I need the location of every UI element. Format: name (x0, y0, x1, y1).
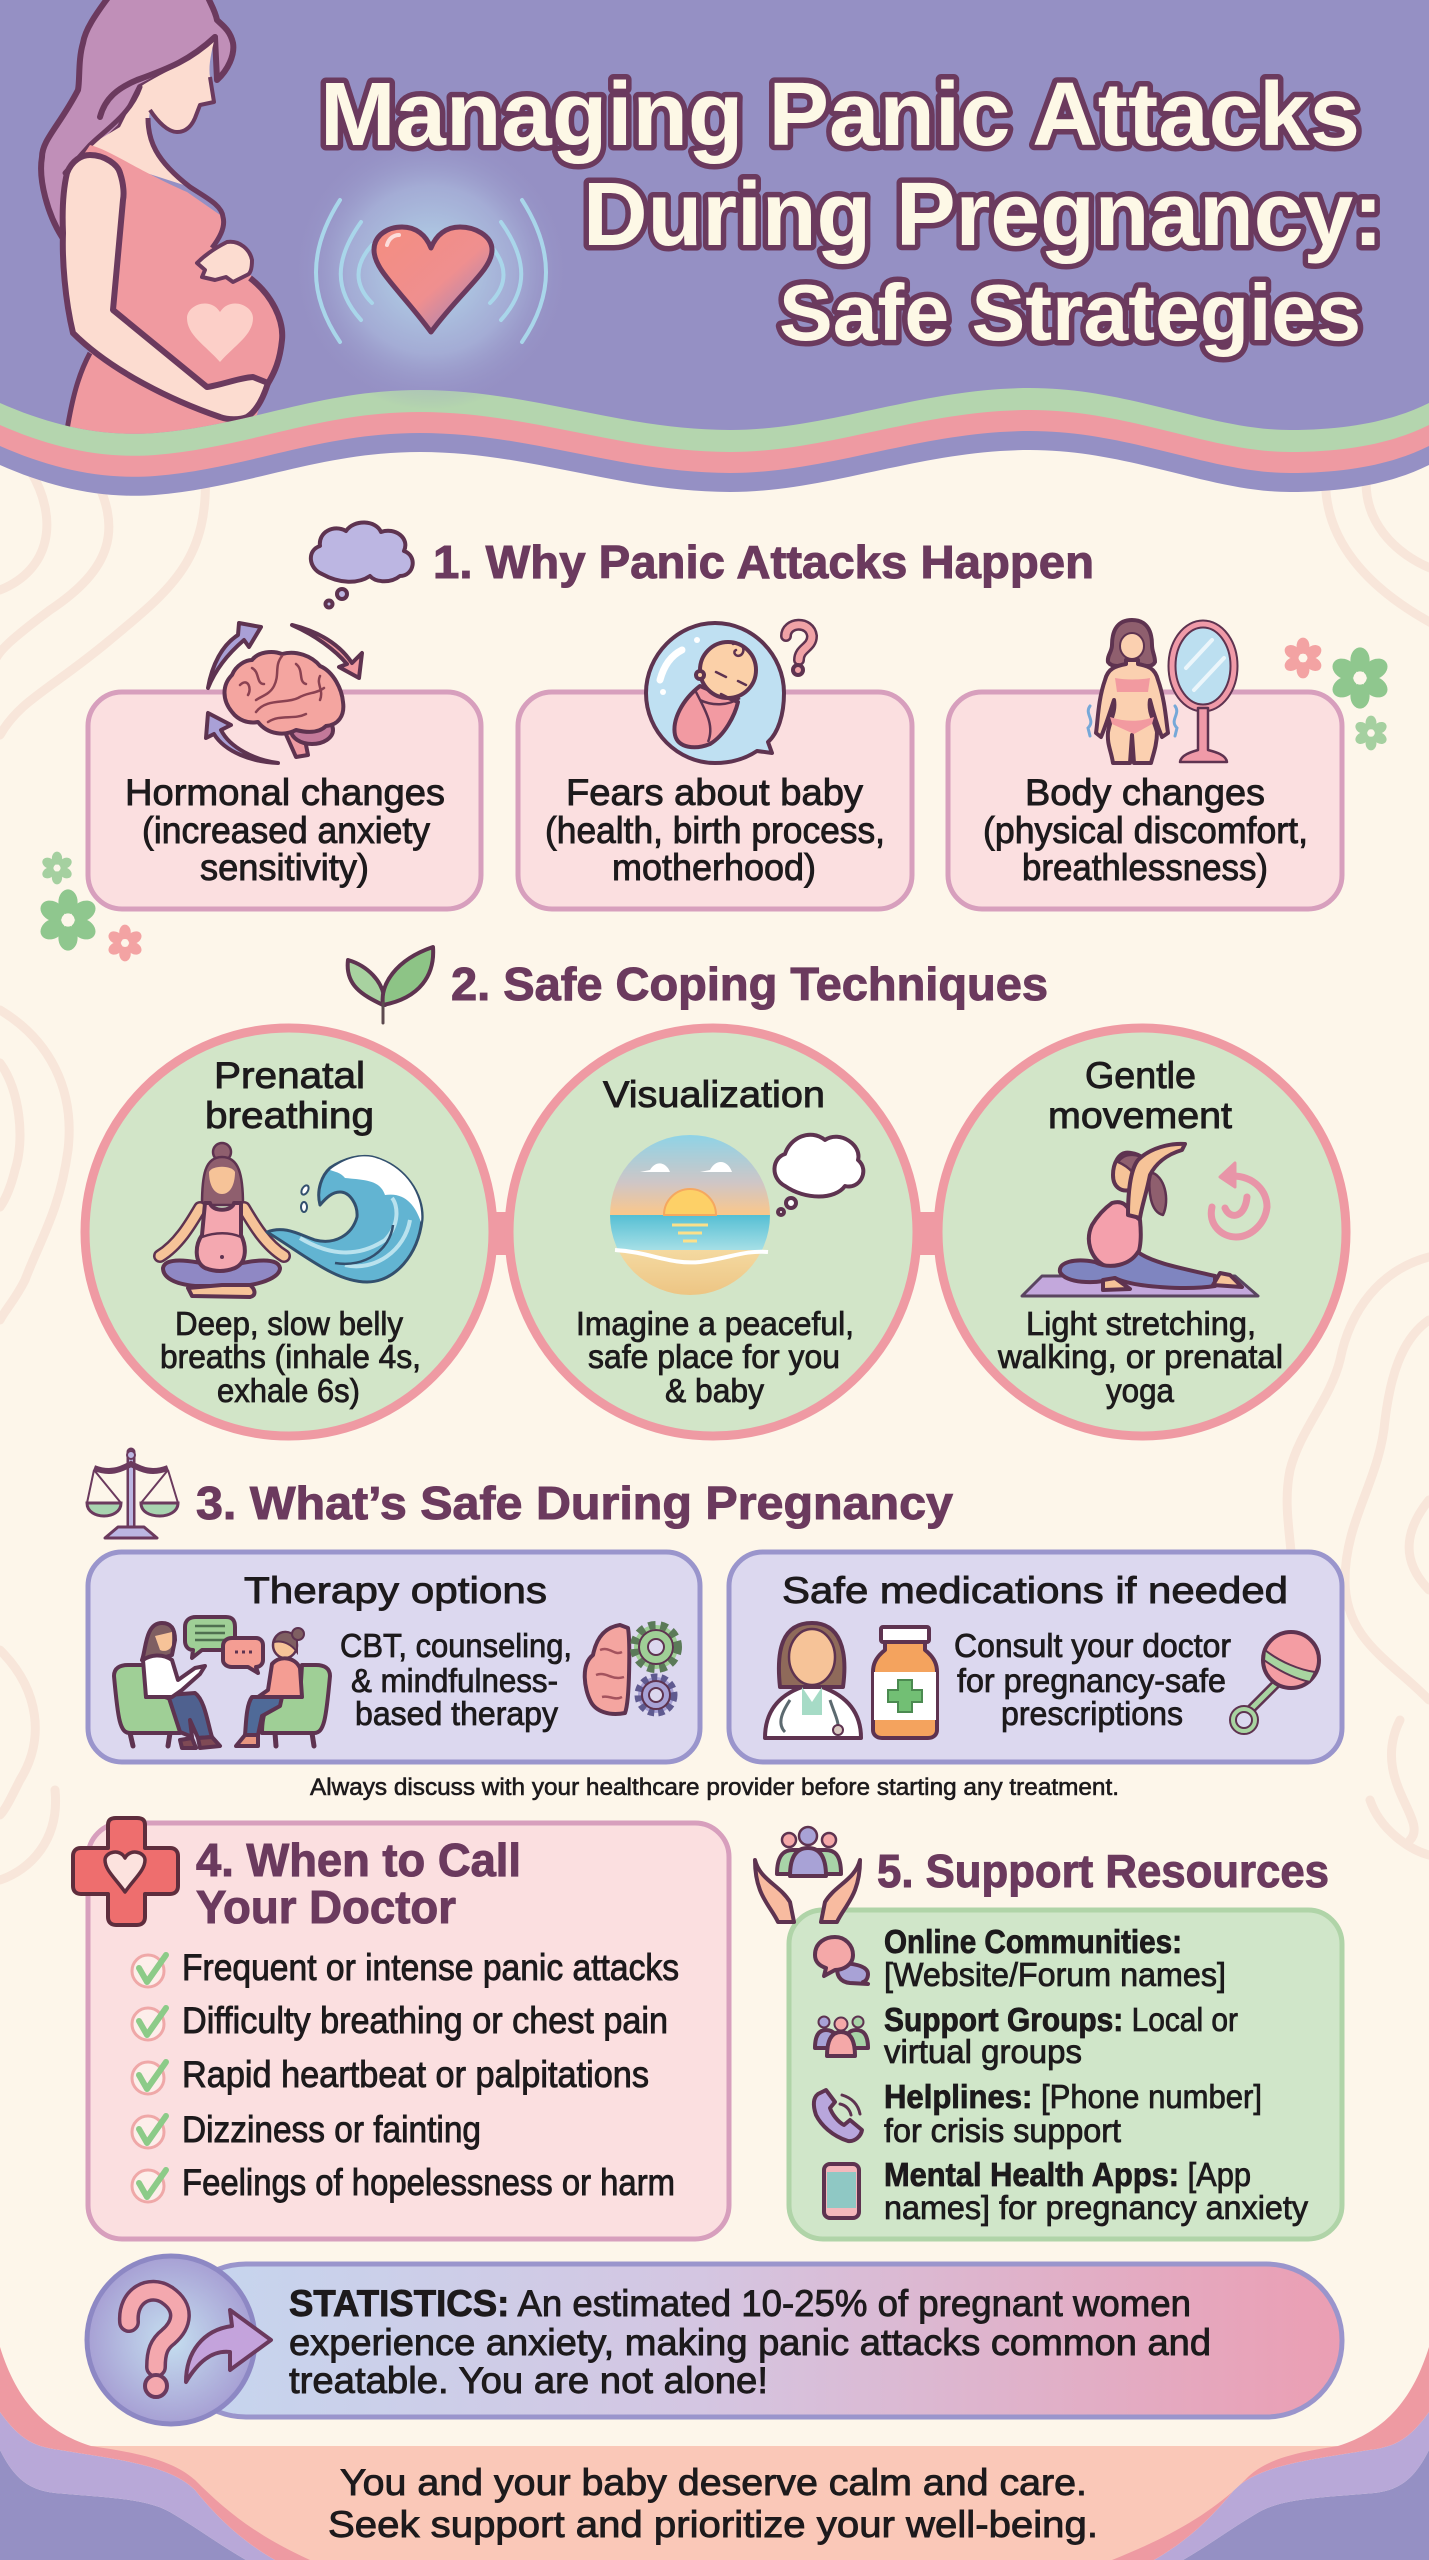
header banner (0, 0, 1429, 496)
card text (983, 772, 1308, 888)
resource: support groups: virtual groups (884, 2033, 1082, 2070)
card text: for pregnancy-safe (957, 1662, 1226, 1699)
card text: Light stretching, (1026, 1305, 1256, 1342)
closing message: Seek support and prioritize your well-being. (328, 2504, 1098, 2545)
resource: mental health apps (824, 2156, 1308, 2226)
icon: baby in bubble (646, 623, 812, 763)
item 2: Difficulty breathing or chest pain (182, 2000, 668, 2041)
icon: question mark and arrow badge (87, 2256, 271, 2424)
statistics text: STATISTICS: An estimated 10-25% of pregnant women (289, 2283, 1191, 2324)
card heading: breathing (205, 1095, 374, 1136)
heading: 5. Support Resources (877, 1845, 1329, 1897)
card text: breathlessness) (1022, 847, 1268, 888)
resource: mental health apps: Mental Health Apps: [App (884, 2156, 1251, 2193)
footer waves (0, 2347, 1429, 2560)
panel: prenatal breathing (85, 1028, 493, 1436)
icon: doctor (765, 1623, 861, 1738)
icon: ocean wave (267, 1156, 422, 1282)
icon: brain with cycle arrows (206, 623, 362, 763)
checklist (132, 1947, 679, 2203)
closing message (328, 2462, 1098, 2545)
card text: Body changes (1025, 772, 1265, 813)
card heading: Therapy options (244, 1570, 547, 1611)
card text (125, 772, 445, 888)
resource: helplines: for crisis support (884, 2112, 1121, 2149)
card heading (205, 1055, 374, 1136)
heading: Your Doctor (196, 1881, 456, 1933)
panel: body changes (948, 620, 1342, 909)
resource: mental health apps: names] for pregnancy anxiety (884, 2189, 1308, 2226)
section 2 heading (348, 947, 1048, 1023)
card heading: movement (1048, 1095, 1233, 1136)
icon: yoga pose (1022, 1144, 1258, 1296)
icon: balance scale (87, 1451, 178, 1538)
panel: fears about baby (518, 623, 912, 909)
card text: sensitivity) (200, 847, 369, 888)
statistics banner (87, 2256, 1342, 2424)
card text: yoga (1106, 1372, 1175, 1409)
card text (576, 1305, 854, 1409)
card text: & mindfulness- (351, 1662, 558, 1699)
card text (545, 772, 885, 888)
item 4: Dizziness or fainting (182, 2109, 481, 2150)
card text: Hormonal changes (125, 772, 445, 813)
resource: online communities: Online Communities: (884, 1923, 1182, 1960)
icon: glowing heart (291, 130, 571, 410)
section 3 heading (87, 1451, 953, 1538)
card text: breaths (inhale 4s, (160, 1338, 421, 1375)
card text: exhale 6s) (217, 1372, 360, 1409)
card heading: Prenatal (214, 1055, 365, 1096)
item 1: Frequent or intense panic attacks (182, 1947, 679, 1988)
card text: (health, birth process, (545, 810, 885, 851)
section 2 heading: 2. Safe Coping Techniques (451, 958, 1048, 1010)
heading (196, 1834, 521, 1933)
icon: thought cloud (311, 522, 413, 608)
item 5: Feelings of hopelessness or harm (182, 2162, 675, 2203)
closing message: You and your baby deserve calm and care. (340, 2462, 1087, 2503)
card text (954, 1627, 1231, 1732)
card text: prescriptions (1001, 1695, 1183, 1732)
panel: support resources (755, 1827, 1342, 2239)
icon: medical cross with heart (73, 1818, 178, 1925)
card text: Deep, slow belly (175, 1305, 403, 1342)
card text: based therapy (355, 1695, 558, 1732)
icon: medicine bottle (873, 1627, 937, 1738)
title: Managing Panic Attacks (320, 65, 1360, 165)
resource: support groups: Support Groups: Local or (884, 2001, 1238, 2038)
card text (997, 1305, 1283, 1409)
icon: meditating woman (160, 1143, 284, 1297)
resource: support groups (815, 2001, 1238, 2070)
card heading: Visualization (603, 1074, 825, 1115)
card heading: Gentle (1085, 1055, 1196, 1096)
connectors between circles (492, 1212, 938, 1255)
icon: baby rattle (1233, 1632, 1319, 1731)
card heading: Safe medications if needed (782, 1570, 1288, 1611)
resource: online communities (815, 1923, 1226, 1993)
panel: hormonal changes (88, 623, 481, 909)
card text (160, 1305, 421, 1409)
card heading (1048, 1055, 1233, 1136)
card text: (physical discomfort, (983, 810, 1308, 851)
heading: 4. When to Call (196, 1834, 521, 1886)
panel: visualization (509, 1028, 917, 1436)
section 1 heading (311, 522, 1094, 608)
card text: Imagine a peaceful, (576, 1305, 854, 1342)
card text: (increased anxiety (142, 810, 430, 851)
statistics text: experience anxiety, making panic attacks common and (289, 2322, 1211, 2363)
panel: safe medications (729, 1552, 1342, 1762)
safety note: Always discuss with your healthcare provider before starting any treatment. (310, 1774, 1119, 1801)
card text: Fears about baby (566, 772, 864, 813)
statistics text: treatable. You are not alone! (289, 2360, 768, 2401)
section 3 heading: 3. What’s Safe During Pregnancy (196, 1477, 953, 1529)
panel: when to call your doctor (73, 1818, 729, 2239)
card text: motherhood) (612, 847, 816, 888)
card text: safe place for you (588, 1338, 840, 1375)
title (320, 65, 1383, 357)
item 3: Rapid heartbeat or palpitations (182, 2054, 649, 2095)
decorative flowers (37, 638, 1391, 961)
panel: gentle movement (938, 1028, 1346, 1436)
icon: hands holding people (755, 1827, 860, 1922)
resource: online communities: [Website/Forum names] (884, 1956, 1226, 1993)
card text: CBT, counseling, (340, 1627, 572, 1664)
panel: therapy options (88, 1552, 700, 1762)
resource: helplines: Helplines: [Phone number] (884, 2078, 1262, 2115)
icon: woman and mirror (1088, 620, 1234, 763)
icon: brain and gears (585, 1625, 678, 1714)
illustration: pregnant woman (41, 0, 282, 450)
section 1 heading: 1. Why Panic Attacks Happen (433, 536, 1094, 588)
title: Safe Strategies (779, 268, 1361, 357)
card text (340, 1627, 572, 1732)
statistics text (289, 2283, 1211, 2401)
icon: therapy session (114, 1617, 330, 1748)
icon: green leaves (348, 947, 433, 1023)
card text: & baby (665, 1372, 764, 1409)
resource: helplines (814, 2078, 1262, 2149)
icon: beach sunset (610, 1135, 770, 1295)
title: During Pregnancy: (583, 165, 1383, 265)
card text: Consult your doctor (954, 1627, 1231, 1664)
icon: thought cloud (774, 1135, 863, 1215)
icon: spiral arrow (1211, 1163, 1267, 1237)
card text: walking, or prenatal (997, 1338, 1283, 1375)
